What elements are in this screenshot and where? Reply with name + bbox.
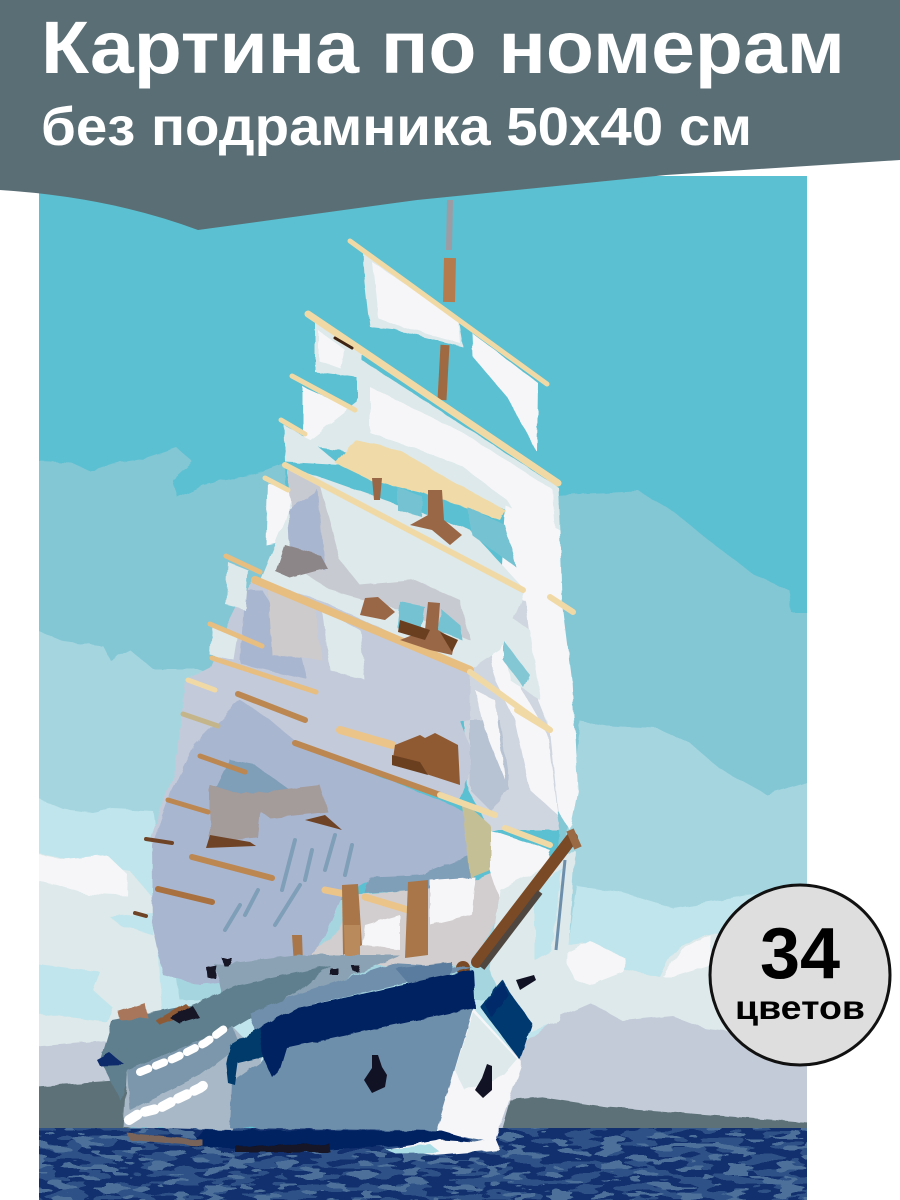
top mast [442, 200, 450, 400]
sail streaks [225, 835, 352, 930]
masts and rigging platforms [206, 478, 462, 965]
middle sails [205, 440, 525, 735]
top banner [0, 0, 900, 230]
badge label: цветов [735, 989, 865, 1026]
hull [123, 962, 532, 1152]
badge number: 34 [760, 914, 840, 994]
distant hills [39, 1080, 807, 1128]
sea [39, 1128, 807, 1200]
badge circle [710, 885, 890, 1065]
bowsprit [456, 830, 578, 975]
hull anchors [364, 975, 536, 1098]
hull portholes and white windows [129, 1026, 228, 1120]
sky background [39, 176, 807, 1200]
deck and stern superstructure [97, 955, 400, 1100]
bow foam [235, 1138, 500, 1155]
sky and cloud layers [30, 448, 815, 1135]
sky windows between sails [397, 487, 530, 687]
upper sails [266, 253, 578, 830]
banner shape [0, 0, 900, 230]
title: Картина по номерам [41, 6, 845, 89]
badge: 34 colors [710, 885, 890, 1065]
lower sails [150, 660, 575, 1035]
painting: sailing ship [30, 176, 815, 1200]
subtitle: без подрамника 50х40 см [41, 97, 752, 157]
yards and spars [135, 241, 573, 916]
ship [97, 200, 578, 1155]
